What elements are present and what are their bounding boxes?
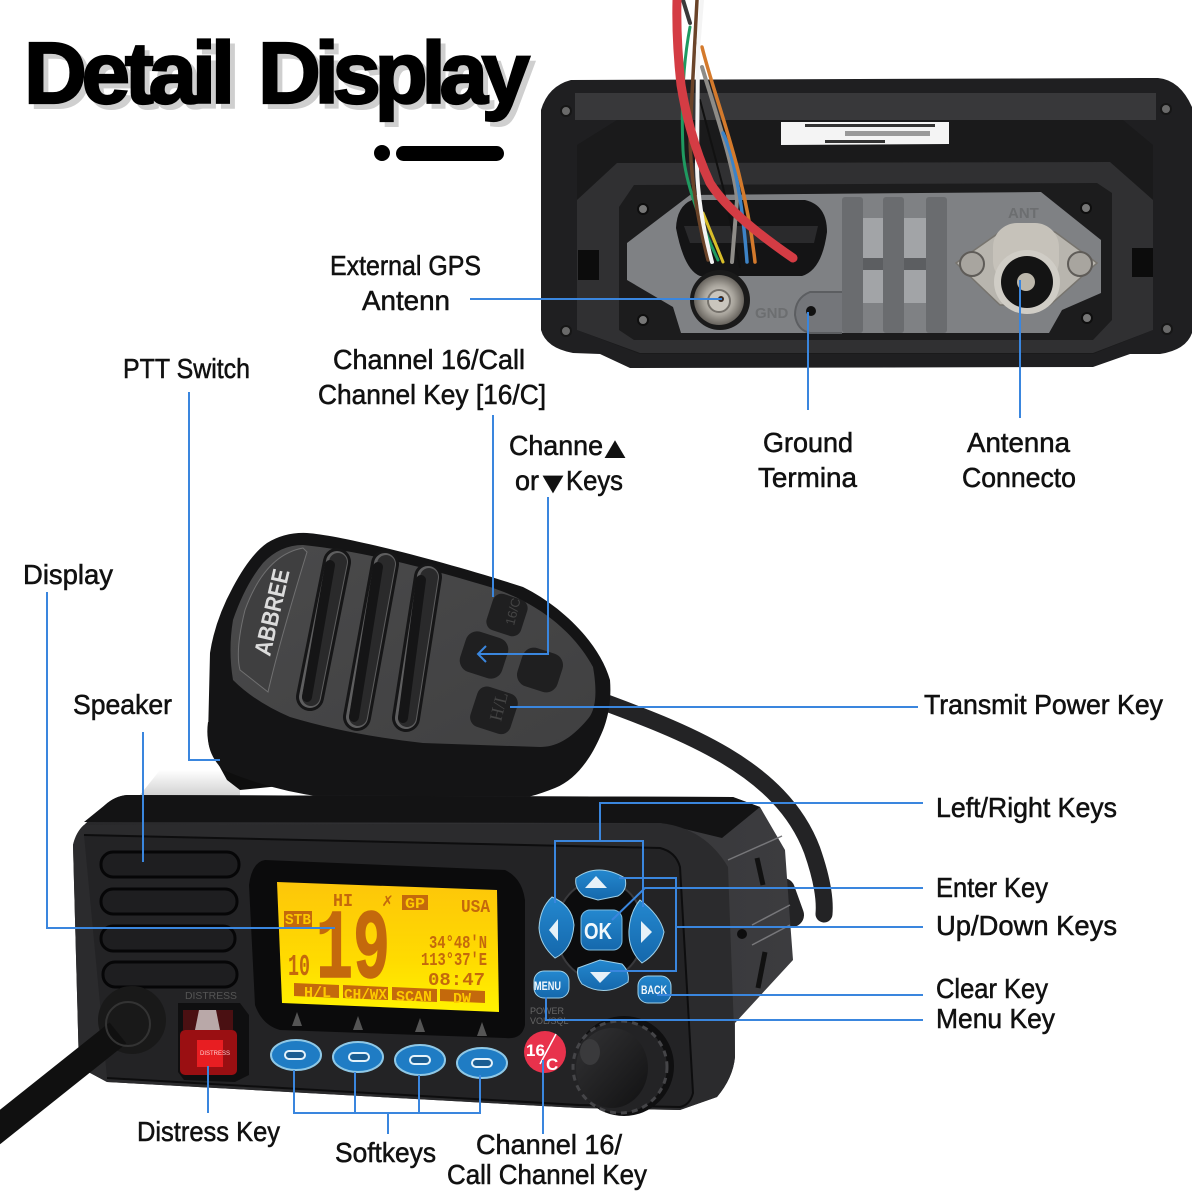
ribs	[842, 197, 947, 333]
leader: Speaker	[142, 732, 144, 862]
leader: Distress Key	[207, 1066, 209, 1113]
title: Display	[263, 30, 535, 127]
volume knob: VOL/SQL	[530, 1016, 569, 1026]
label: Antenna Connecto: Antenna	[967, 427, 1070, 458]
serial label	[781, 122, 949, 145]
left key	[539, 897, 574, 958]
distress key	[178, 991, 249, 1082]
title accent: dot and pill	[374, 145, 504, 161]
radio front face	[73, 823, 735, 1110]
label: Ground Termina: Termina	[758, 462, 857, 493]
label: Channel 16/Call Channel Key [16/C]	[318, 344, 546, 410]
handheld microphone and cord	[140, 533, 824, 915]
mic face	[230, 545, 595, 747]
label: Channel 16/ Call Channel Key: Channel 16/	[476, 1129, 622, 1160]
mic brand badge: ABBREE	[250, 567, 296, 658]
rear housing	[541, 78, 1192, 368]
antenna connector: ANT	[1008, 205, 1039, 222]
leader: Channel 16/Call Channel Key on mic	[492, 415, 494, 597]
mounting screws	[561, 104, 1172, 336]
leader: Left/Right Keys	[555, 803, 923, 907]
LCD readouts: 113°37'E	[421, 951, 487, 971]
main radio unit	[0, 795, 793, 1135]
title: Detail	[24, 25, 235, 122]
label: External GPS Antenn: Antenn	[362, 285, 450, 316]
LCD readouts: CH/WX	[344, 987, 387, 1004]
radio top ledge	[84, 795, 760, 838]
mic keys: H/L	[485, 690, 512, 723]
volume knob	[530, 1006, 674, 1116]
distress key: DISTRESS	[185, 991, 237, 1002]
mic body	[208, 533, 610, 802]
speaker grilles	[307, 562, 429, 718]
antenna connector	[956, 205, 1097, 314]
leader: External GPS Antenn	[470, 298, 722, 300]
label: Display: Display	[23, 559, 113, 590]
rear view of radio	[541, 0, 1192, 368]
label: Menu Key: Menu Key	[936, 1003, 1055, 1034]
label: Antenna Connecto	[962, 427, 1076, 493]
LCD screen	[277, 882, 499, 1012]
inner frame	[619, 183, 1112, 340]
LCD readouts: HI	[333, 892, 353, 912]
wires	[677, 0, 793, 267]
navigation cluster	[534, 870, 671, 1003]
menu key: MENU	[534, 979, 561, 993]
leader: PTT Switch	[189, 392, 220, 760]
softkeys	[271, 1040, 507, 1078]
label: PTT Switch: PTT Switch	[123, 353, 250, 384]
back key: BACK	[641, 983, 667, 997]
label: Channel up/down Keys: ▼	[543, 471, 563, 496]
side slots	[578, 248, 1153, 280]
down key	[578, 960, 628, 991]
label: Ground Termina	[758, 427, 857, 493]
LCD readouts: 08:47	[428, 971, 485, 991]
LCD readouts: USA	[461, 898, 490, 918]
LCD readouts: H/L	[304, 985, 331, 1002]
label: External GPS Antenn	[330, 250, 481, 316]
radio body silhouette	[73, 795, 793, 1110]
mic brand badge	[238, 548, 307, 692]
side markings	[728, 836, 790, 988]
speaker slots	[101, 852, 239, 987]
plate screws	[638, 203, 1092, 325]
LCD readouts: DW	[453, 991, 471, 1008]
mic cord	[585, 695, 824, 915]
power cord strain relief	[0, 986, 166, 1135]
label: Channel up/down Keys: or	[515, 465, 539, 496]
LCD readouts: 19	[316, 896, 390, 1007]
label: Ground Termina: Ground	[763, 427, 853, 458]
LCD readouts: SCAN	[396, 989, 432, 1006]
table shadow	[140, 770, 240, 797]
label: Antenna Connecto: Connecto	[962, 462, 1076, 493]
gray plate	[627, 192, 1101, 333]
label: Left/Right Keys: Left/Right Keys	[936, 792, 1117, 823]
right key	[629, 900, 664, 963]
label: Channel 16/Call Channel Key [16/C]: Channel Key [16/C]	[318, 379, 546, 410]
leader: Display	[47, 592, 335, 928]
label: Channel 16/ Call Channel Key	[447, 1129, 647, 1190]
distress key: DISTRESS	[200, 1051, 230, 1057]
16/C key: C	[546, 1055, 558, 1074]
label: Clear Key: Clear Key	[936, 973, 1048, 1004]
label: Channel up/down Keys: Keys	[566, 465, 623, 496]
ground terminal	[755, 292, 842, 333]
title	[24, 25, 535, 127]
label: Speaker: Speaker	[73, 689, 172, 720]
label: Distress Key: Distress Key	[137, 1116, 280, 1147]
up key	[576, 870, 626, 900]
label: Channel up/down Keys: Channe	[509, 430, 603, 461]
label: Softkeys: Softkeys	[335, 1137, 436, 1168]
16/C key: 16	[526, 1041, 545, 1060]
LCD readouts: ✗	[382, 892, 393, 912]
label: Channel 16/Call Channel Key [16/C]: Channel 16/Call	[333, 344, 525, 375]
display bezel	[249, 860, 525, 1038]
mic keys: 16/C	[502, 596, 524, 627]
label: Channel 16/ Call Channel Key: Call Channel Key	[447, 1159, 647, 1190]
ground terminal: GND	[755, 305, 788, 322]
mic clip base	[207, 722, 290, 790]
LCD readouts	[284, 892, 490, 1008]
label: Channel up/down Keys	[509, 430, 625, 496]
leader: Clear Key	[657, 994, 923, 996]
title: Display	[258, 25, 530, 122]
leader: Ground Termina	[807, 312, 809, 410]
label: Up/Down Keys: Up/Down Keys	[936, 910, 1117, 941]
leader: Antenna Connecto	[1019, 280, 1021, 418]
wiring connector	[676, 200, 827, 276]
leader: Up/Down Keys	[610, 878, 923, 971]
leader: Transmit Power Key	[510, 706, 918, 708]
leader: Softkeys	[294, 1070, 480, 1134]
softkey pointers	[292, 1012, 487, 1036]
mic keys	[457, 591, 566, 737]
label: External GPS Antenn: External GPS	[330, 250, 481, 281]
callout leader lines	[47, 280, 1020, 1134]
LCD readouts: 34°48'N	[429, 934, 487, 954]
label: Channel up/down Keys: ▲	[605, 436, 625, 461]
GPS connector	[690, 270, 750, 330]
16/C key	[524, 1031, 566, 1074]
leader: Menu Key	[546, 997, 923, 1020]
volume knob: POWER	[530, 1006, 565, 1016]
LCD readouts: 10	[288, 950, 310, 985]
leader: Channel up/down keys with arrowhead	[478, 497, 548, 662]
leader: Channel 16/Call Channel Key on radio	[542, 1060, 544, 1134]
title: Detail	[29, 30, 240, 127]
leader: Enter Key	[612, 888, 923, 920]
OK key: OK	[584, 918, 612, 944]
label: Enter Key: Enter Key	[936, 872, 1048, 903]
label: Transmit Power Key: Transmit Power Key	[924, 689, 1163, 720]
LCD readouts: GP	[405, 896, 425, 913]
LCD readouts: STB	[285, 912, 311, 929]
